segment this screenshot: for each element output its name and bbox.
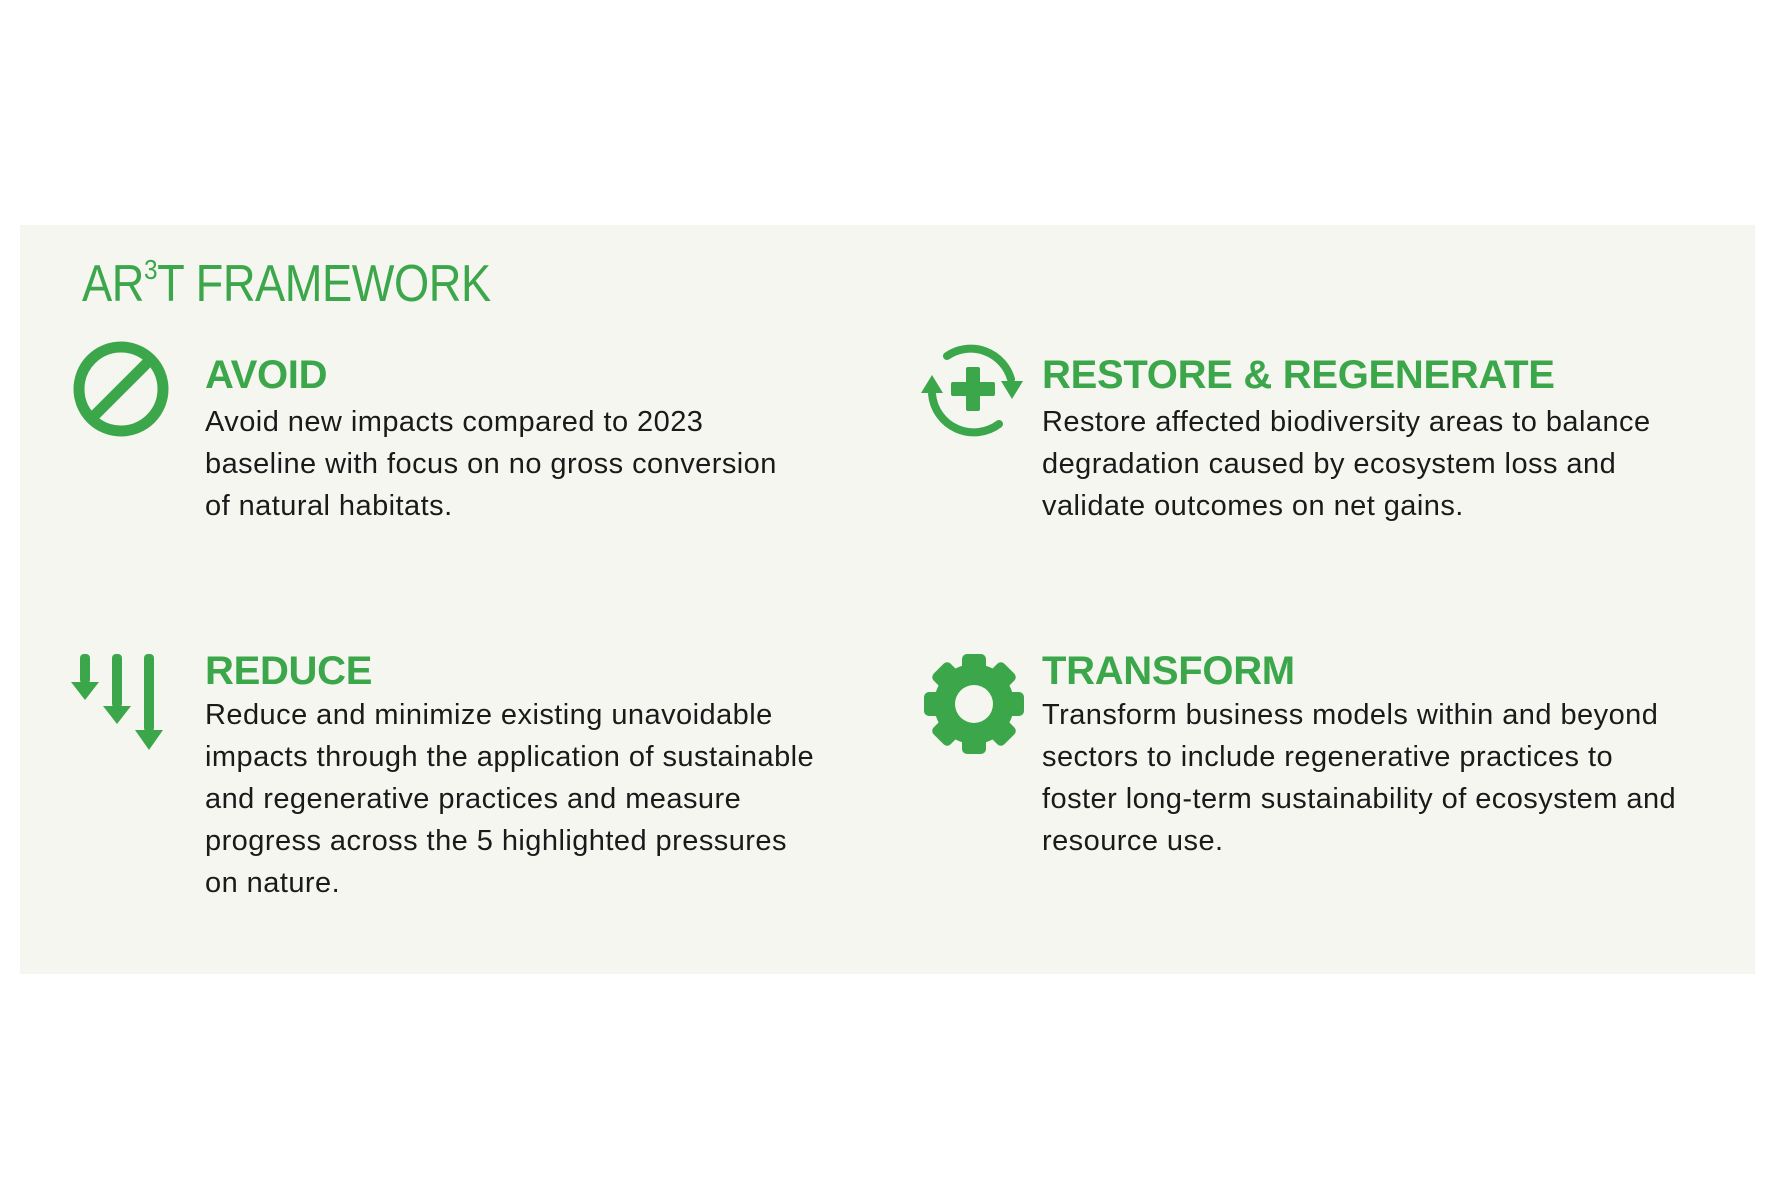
text: transform: foster long-term sustainability of ecosystem and xyxy=(1042,783,1676,815)
panel: framework background xyxy=(20,225,1755,974)
text: avoid: of natural habitats. xyxy=(205,490,453,522)
text: reduce: Reduce and minimize existing unavoidable xyxy=(205,699,773,731)
icon: avoid prohibition sign xyxy=(74,342,168,436)
text: reduce: on nature. xyxy=(205,867,340,899)
text: avoid: Avoid new impacts compared to 2023 xyxy=(205,406,703,438)
icon: transform gear xyxy=(924,654,1024,754)
text: restore: Restore affected biodiversity areas to balance xyxy=(1042,406,1651,438)
text: transform xyxy=(1042,699,1676,857)
heading: reduce: REDUCE xyxy=(205,649,372,693)
text: reduce: progress across the 5 highlighted pressures xyxy=(205,825,787,857)
heading: avoid: AVOID xyxy=(205,353,327,397)
text: reduce: impacts through the application of sustainable xyxy=(205,741,814,773)
text: avoid: baseline with focus on no gross conversion xyxy=(205,448,777,480)
text: reduce: and regenerative practices and measure xyxy=(205,783,741,815)
text: avoid xyxy=(205,406,777,522)
text: reduce xyxy=(205,699,814,899)
text: transform: Transform business models within and beyond xyxy=(1042,699,1658,731)
heading: transform: TRANSFORM xyxy=(1042,649,1295,693)
text: transform: resource use. xyxy=(1042,825,1224,857)
icon: restore cycle with plus xyxy=(921,344,1023,436)
text: restore xyxy=(1042,406,1651,522)
heading: restore & regenerate: RESTORE & REGENERATE xyxy=(1042,353,1555,397)
title: AR3T FRAMEWORK xyxy=(82,254,491,313)
text: restore: validate outcomes on net gains. xyxy=(1042,490,1464,522)
icon: reduce down arrows xyxy=(71,654,163,750)
text: transform: sectors to include regenerative practices to xyxy=(1042,741,1613,773)
text: restore: degradation caused by ecosystem loss and xyxy=(1042,448,1616,480)
